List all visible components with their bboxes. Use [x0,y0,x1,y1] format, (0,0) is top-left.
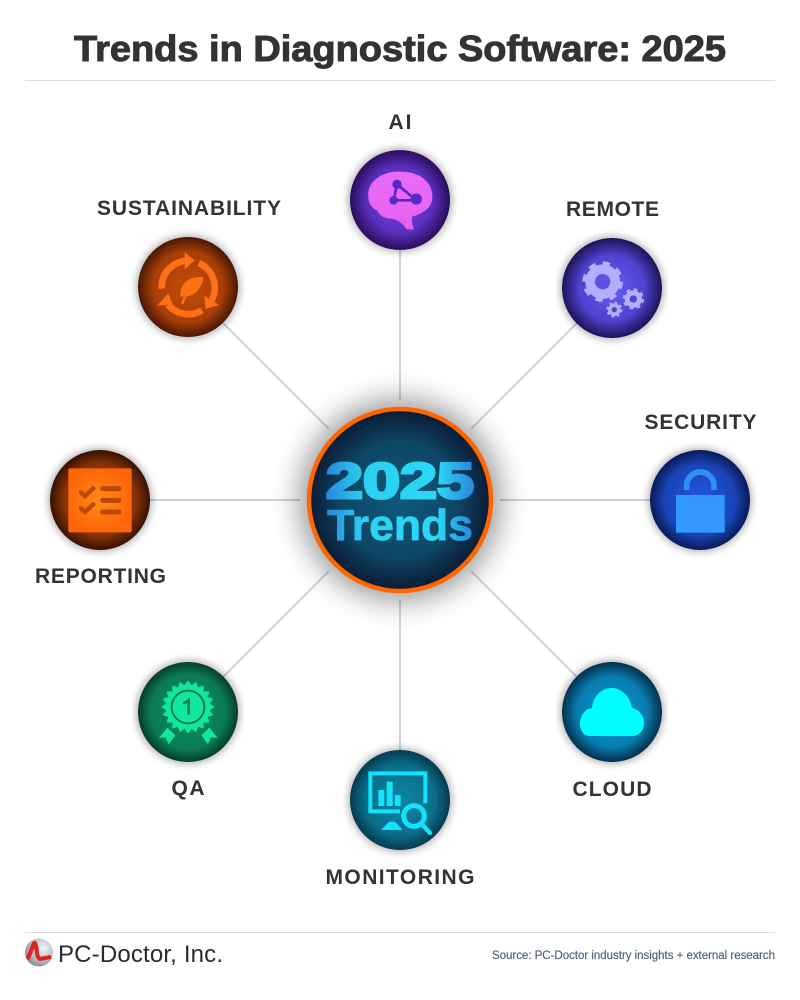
label: AI: AI [388,111,412,134]
icon: monitor with magnifier [370,773,430,833]
node: Reporting [35,448,166,588]
icon: checklist [68,468,132,532]
center text: 2025: 2025 [326,453,474,509]
connector lines [150,250,650,750]
label: Remote: REMOTE [566,198,659,221]
icon: award ribbon [159,680,218,744]
disc: Reporting [50,450,150,550]
label: Security: SECURITY [644,411,756,434]
node: Monitoring [326,748,474,889]
label: Monitoring: MONITORING [326,866,474,889]
disc: Security [650,450,750,550]
label: QA: QA [172,777,204,800]
node: Remote [560,198,664,340]
icon: recycle leaf [157,252,219,314]
label: Sustainability: SUSTAINABILITY [97,197,281,220]
label: Cloud: CLOUD [572,778,652,801]
disc: Remote [562,238,662,338]
disc: Cloud [562,662,662,762]
node: Security [644,411,756,552]
icon: cloud [580,688,644,736]
icon: padlock [676,472,725,533]
node: AI [348,111,452,252]
title: Trends in Diagnostic Software: 2025 [74,28,726,69]
logo mark [25,938,53,966]
disc: Sustainability [138,237,238,337]
logo wordmark: PC-Doctor, Inc. [58,941,223,968]
label: Reporting: REPORTING [35,565,166,588]
node: Cloud [560,660,664,801]
icon: gears [584,263,643,317]
disc: QA [138,662,238,762]
disc: Monitoring [350,750,450,850]
logo: PC-Doctor [25,938,223,968]
node: Sustainability [97,197,281,339]
icon: brain network [368,172,432,229]
source note: Source: PC-Doctor industry insights + external research [492,950,775,962]
center badge [300,400,500,600]
center text: Trends: Trends [327,501,473,550]
disc: AI [350,150,450,250]
node: QA [136,660,240,800]
